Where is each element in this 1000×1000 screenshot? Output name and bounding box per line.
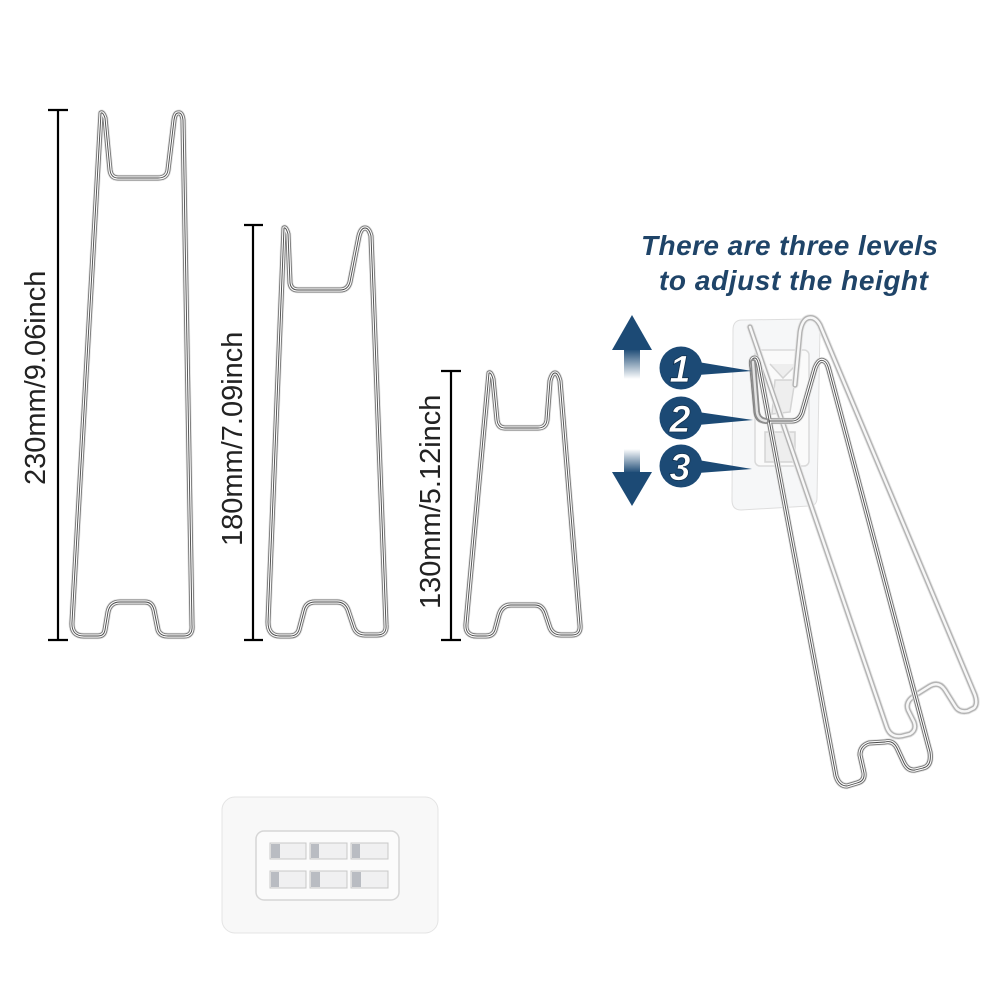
clip slots: [270, 843, 388, 888]
hanger: front position: [751, 358, 930, 786]
heading: three levels: There are three levels: [641, 230, 938, 261]
hanger: small wire hanger: [466, 373, 580, 636]
hanger: medium wire hanger: [268, 228, 386, 636]
badge: level 2: [660, 396, 753, 441]
hanger: large wire hanger: [72, 113, 192, 636]
badge: level 3: [660, 444, 752, 489]
badge: level 1: [660, 346, 752, 391]
heading: three levels: [641, 230, 938, 296]
icon: down arrow: [612, 449, 652, 506]
dimension line: 130mm: [441, 371, 461, 640]
icon: up arrow: [612, 315, 652, 379]
hanger: faded rear position: [750, 318, 976, 736]
adhesive pad: front view: [222, 797, 438, 933]
dimension line: 230mm: [48, 110, 68, 640]
label: 130mm/5.12inch: 130mm/5.12inch: [415, 395, 447, 609]
label: 180mm/7.09inch: 180mm/7.09inch: [217, 332, 249, 546]
adhesive plate: transparent wall mount: [732, 319, 820, 510]
badge: level 2: 2: [668, 399, 691, 441]
label: 230mm/9.06inch: 230mm/9.06inch: [20, 271, 52, 485]
heading: three levels: to adjust the height: [659, 265, 930, 296]
dimension line: 180mm: [244, 225, 263, 640]
badge: level 3: 3: [669, 447, 691, 489]
badge: level 1: 1: [669, 349, 691, 391]
